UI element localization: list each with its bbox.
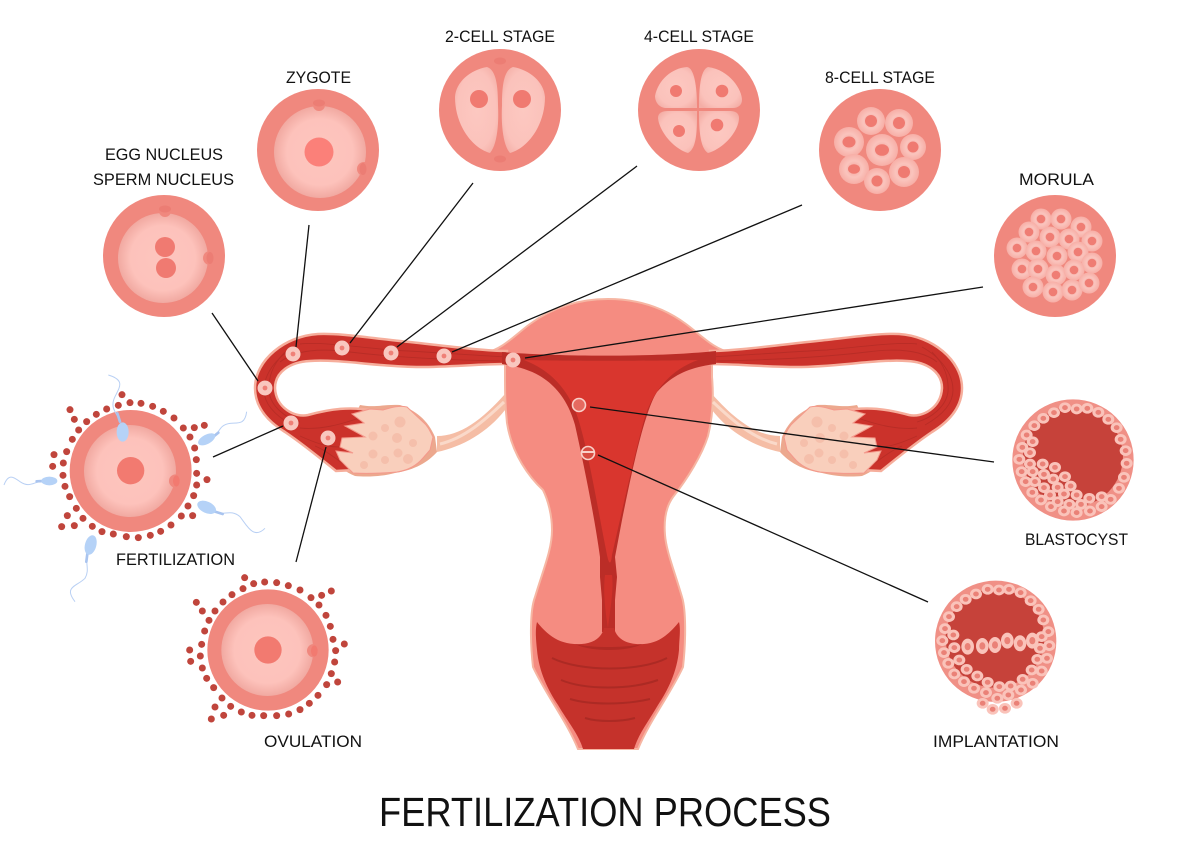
label: 4-cell stage: 4-CELL STAGE [644, 27, 754, 46]
right fallopian tube and ovary [710, 334, 962, 477]
stage: morula [994, 195, 1116, 317]
label: egg nucleus / sperm nucleus: EGG NUCLEUS [105, 145, 223, 164]
stage: 8-cell [819, 89, 941, 211]
label: egg nucleus / sperm nucleus: SPERM NUCLEUS [93, 170, 234, 189]
label: blastocyst: BLASTOCYST [1025, 530, 1128, 549]
title: FERTILIZATION PROCESS [379, 789, 831, 835]
embryo markers along tube [258, 340, 594, 460]
stage: fertilization [4, 375, 265, 602]
stage: implantation [935, 581, 1056, 715]
label: fertilization: FERTILIZATION [116, 550, 235, 569]
label: morula: MORULA [1019, 170, 1095, 189]
label: 2-cell stage: 2-CELL STAGE [445, 27, 555, 46]
label: 8-cell stage: 8-CELL STAGE [825, 68, 935, 87]
stage: zygote [257, 89, 379, 211]
leader lines [212, 166, 994, 602]
label: ovulation: OVULATION [264, 732, 362, 751]
label: egg nucleus / sperm nucleus [93, 145, 234, 189]
stage: 2-cell [439, 49, 561, 171]
left fallopian tube and ovary [255, 334, 507, 477]
label: zygote: ZYGOTE [286, 68, 351, 87]
uterine cavity [502, 351, 716, 632]
stage: egg nucleus and sperm nucleus [103, 195, 225, 317]
diagram: uterus and fallopian tubes [255, 299, 962, 749]
stage: blastocyst [1012, 399, 1134, 521]
uterus body [485, 299, 732, 749]
stage: ovulation [186, 574, 348, 722]
stage: 4-cell [638, 49, 760, 171]
label: implantation: IMPLANTATION [933, 732, 1059, 751]
vaginal canal [536, 622, 680, 749]
